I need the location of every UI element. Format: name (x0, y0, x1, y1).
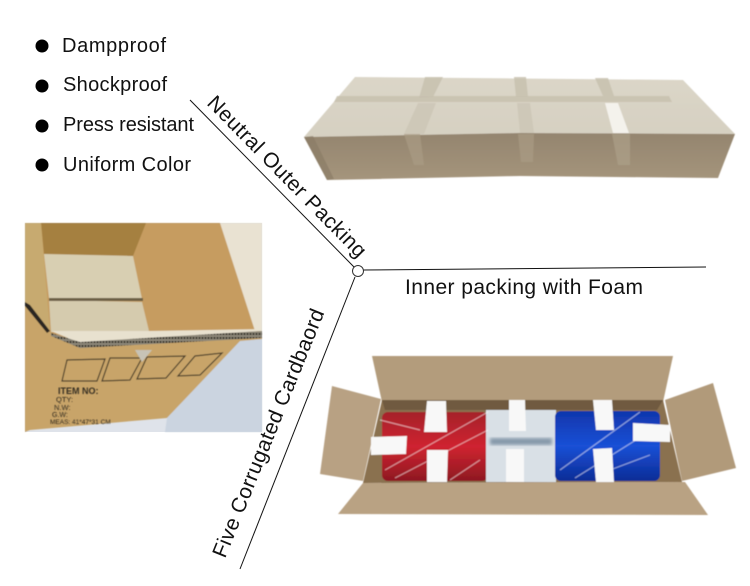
carton print: QTY: (56, 395, 73, 404)
connector: inner packing (363, 267, 706, 270)
connector: corrugated cardboard (240, 277, 355, 569)
carton print: MEAS: 41*47*31 CM (50, 419, 111, 426)
label: Inner packing with Foam: Inner packing with Foam (405, 276, 643, 299)
foam-wrapped light bar (380, 410, 660, 482)
junction node (352, 266, 364, 276)
bullet: Dampproof: Dampproof (62, 35, 166, 57)
label: Neutral Outer Packing: Neutral Outer Packing (202, 91, 371, 262)
carton print: G.W: (52, 412, 68, 419)
carton print: ITEM NO: (58, 386, 98, 396)
bullet: Uniform Color: Uniform Color (63, 154, 191, 176)
label: Five Corrugated Cardbaord: Five Corrugated Cardbaord (208, 306, 329, 561)
photo: five corrugated carton (25, 223, 262, 432)
photo: inner packing with foam (320, 356, 736, 515)
foam blocks (371, 400, 670, 482)
bullet: Press resistant: Press resistant (63, 114, 194, 136)
bullet: Shockproof: Shockproof (63, 74, 167, 96)
carton print (50, 386, 111, 426)
feature list (36, 35, 194, 176)
photo: outer carton (304, 77, 735, 180)
carton print: N.W: (54, 403, 71, 412)
connector: neutral outer packing (190, 100, 354, 267)
